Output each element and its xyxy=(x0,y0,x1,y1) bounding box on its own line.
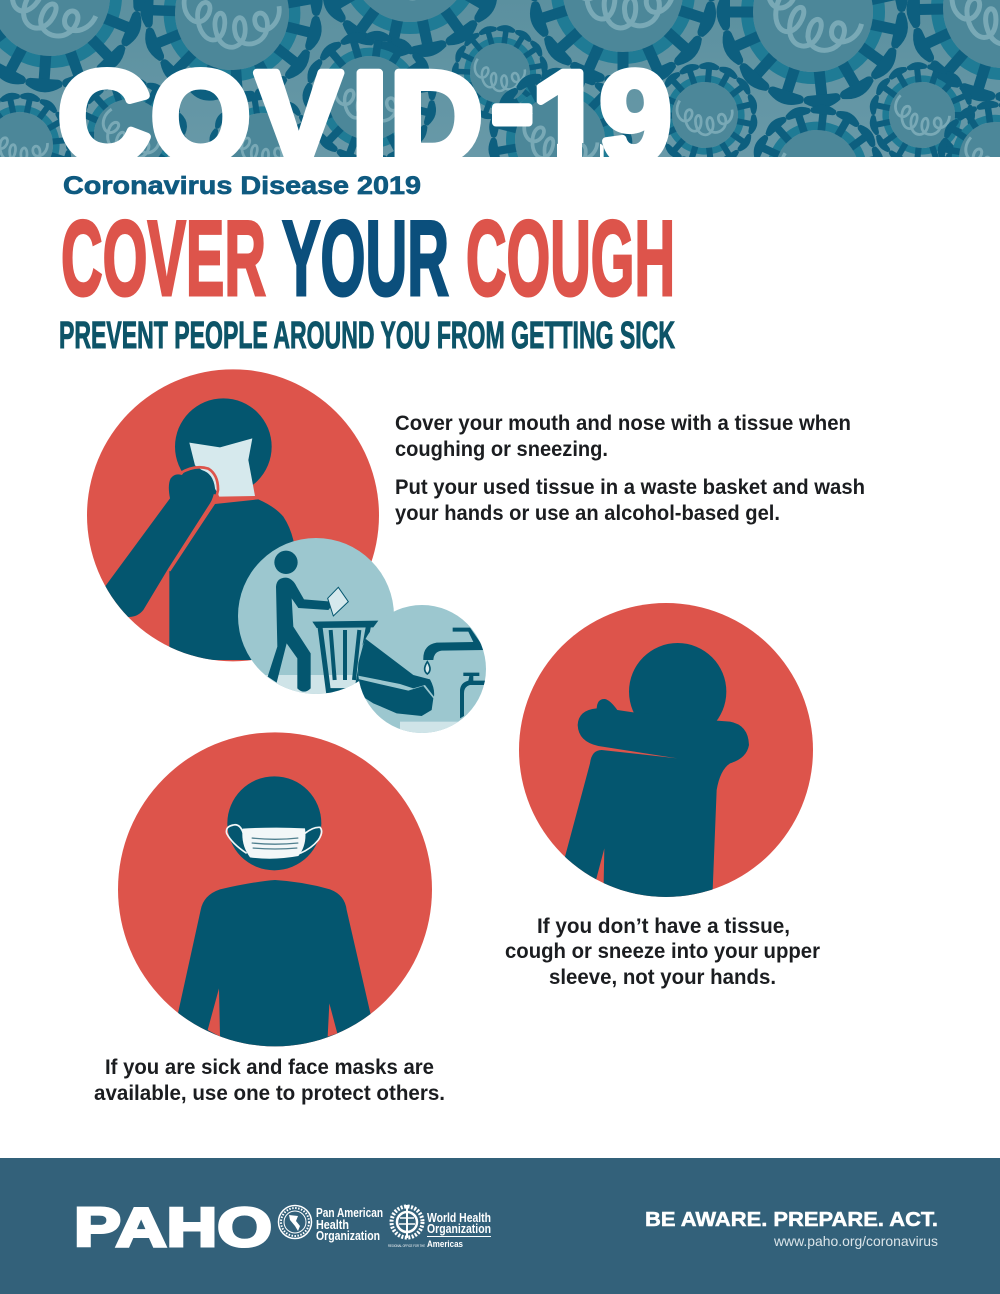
text block: tissue instructions: Cover your mouth and nose with a tissue when xyxy=(395,412,851,435)
url: www.paho.org/coronavirus xyxy=(773,1233,938,1249)
text block: face mask xyxy=(94,1056,445,1105)
text block: face mask: available, use one to protect others. xyxy=(94,1082,445,1105)
text block: tissue instructions xyxy=(395,412,865,525)
banner: virus pattern xyxy=(0,0,1000,157)
text: Pan American Health Organization: Organization xyxy=(316,1229,380,1243)
text block: upper sleeve: cough or sneeze into your upper xyxy=(505,940,820,963)
emblem: PAHO seal xyxy=(278,1206,312,1238)
text block: face mask: If you are sick and face masks are xyxy=(105,1056,434,1079)
text: Pan American Health Organization xyxy=(316,1206,383,1243)
text block: tissue instructions: your hands or use an alcohol-based gel. xyxy=(395,502,780,525)
tagline: BE AWARE. PREPARE. ACT. xyxy=(645,1209,938,1231)
heading: cover your cough: COVER xyxy=(61,198,266,318)
illustration: person covering mouth with tissue xyxy=(87,369,379,661)
illustration: coughing into sleeve xyxy=(519,603,813,900)
text: Pan American Health Organization: Health xyxy=(316,1218,349,1232)
heading: cover your cough: YOUR xyxy=(282,198,449,318)
text block: upper sleeve: sleeve, not your hands. xyxy=(549,966,776,989)
text block: upper sleeve xyxy=(505,915,820,989)
text: Pan American Health Organization: Pan American xyxy=(316,1206,383,1220)
heading: cover your cough: COUGH xyxy=(466,198,675,318)
subtitle: Coronavirus Disease 2019: Coronavirus Disease 2019 xyxy=(63,172,421,200)
text block: tissue instructions: Put your used tissue in a waste basket and wash xyxy=(395,476,865,499)
footer bar xyxy=(0,1158,1000,1294)
text: World Health Organization xyxy=(388,1211,491,1249)
logo: PAHO: PAHO xyxy=(74,1196,272,1258)
text: World Health Organization: Organization xyxy=(427,1222,491,1236)
text block: tissue instructions: coughing or sneezing. xyxy=(395,438,608,461)
heading: cover your cough xyxy=(61,198,675,318)
text: World Health Organization: Americas xyxy=(427,1239,463,1249)
text: World Health Organization: REGIONAL OFFICE FOR THE xyxy=(388,1244,426,1248)
illustration: washing hands under faucet xyxy=(355,605,490,735)
emblem: WHO xyxy=(392,1205,422,1238)
illustration: person wearing face mask xyxy=(118,732,432,1070)
title: COVID-19: COVID-19 xyxy=(58,33,671,189)
text block: upper sleeve: If you don’t have a tissue, xyxy=(537,915,790,938)
text: World Health Organization: World Health xyxy=(427,1211,491,1225)
illustration: person throwing tissue in waste basket xyxy=(237,538,397,698)
